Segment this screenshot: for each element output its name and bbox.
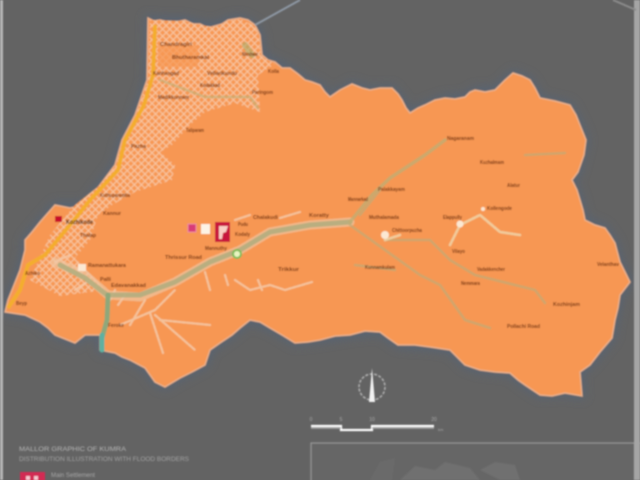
- east branches: [350, 153, 565, 328]
- town labels: Trikkur: [278, 267, 299, 273]
- town labels: Mannuthy: [205, 246, 227, 252]
- scale bar: [310, 417, 444, 432]
- town labels: Kollengode: [487, 206, 512, 212]
- town labels: Kannur: [103, 211, 121, 217]
- town labels: Nileshwar: [242, 52, 258, 58]
- town labels: Chittoorpuzha: [392, 228, 422, 234]
- town labels: Beyp: [16, 301, 27, 307]
- map title: MALLOR GRAPHIC OF KUMRA: [19, 447, 126, 453]
- tributaries: [55, 212, 312, 353]
- town labels: [16, 42, 619, 330]
- frame edges: [0, 0, 3, 480]
- main channel: [60, 222, 350, 295]
- map subtitle: DISTRIBUTION ILLUSTRATION WITH FLOOD BORDERS: [19, 457, 189, 463]
- town labels: Mannarkad: [348, 197, 368, 203]
- town labels: Ramanattukara: [88, 263, 126, 269]
- town labels: Azhiko: [25, 271, 40, 277]
- plain patch north: [158, 45, 198, 67]
- town labels: Madikkunnam: [158, 95, 190, 101]
- coastal strip: [8, 25, 155, 308]
- icon: white site marker: [201, 224, 210, 234]
- icon: pink site marker: [188, 224, 196, 232]
- icon: red site marker: [215, 222, 230, 242]
- town labels: Velanthav: [597, 262, 619, 268]
- town labels: Pazha: [131, 144, 146, 150]
- hatched coastal zone: [30, 19, 275, 296]
- town labels: Vadakkencher: [477, 267, 505, 273]
- town labels: Nagaranam: [447, 136, 475, 142]
- legend label: Main Settlement: [51, 473, 95, 479]
- scale bar: km: [438, 427, 444, 432]
- icon: north arrow: [359, 368, 385, 402]
- town labels: Alatur: [507, 183, 520, 189]
- panel: basin area: [5, 18, 630, 396]
- river network: [55, 45, 565, 353]
- town labels: Taliparam: [186, 128, 204, 134]
- legend icon: [20, 472, 45, 480]
- town labels: Feroke: [108, 323, 124, 329]
- inset locator map: [311, 443, 640, 480]
- label: regional town: Kozhikode: [66, 220, 94, 226]
- town labels: Chandragiri: [160, 42, 193, 48]
- scale bar: 20: [431, 417, 437, 423]
- town labels: Kodakkad: [200, 83, 220, 89]
- town labels: Koratty: [309, 213, 329, 219]
- scale bar: 5: [340, 417, 343, 423]
- town labels: Nemmara: [461, 281, 480, 287]
- town labels: Kuthuparamba: [100, 193, 130, 199]
- town labels: Palli: [100, 277, 112, 283]
- town labels: Kunnamkulam: [365, 265, 395, 271]
- town labels: Palakkayam: [378, 187, 406, 193]
- town labels: Elappully: [443, 215, 462, 221]
- town labels: Kolla: [268, 69, 279, 75]
- icon: green ring marker: [233, 250, 241, 258]
- town labels: Pollachi Road: [507, 324, 540, 330]
- town labels: Vellarikundu: [207, 71, 237, 77]
- town labels: Muthalamada: [369, 215, 399, 221]
- town labels: Vilayo: [452, 249, 465, 255]
- scale bar: 10: [369, 417, 375, 423]
- town labels: Bhutharamkal: [172, 55, 210, 61]
- town markers: [78, 207, 485, 271]
- town labels: Pudu: [238, 222, 248, 228]
- shadow around basin: [5, 18, 630, 396]
- town labels: Thalap: [80, 233, 96, 239]
- town labels: Paringom: [252, 90, 274, 96]
- floodplain margin: [55, 222, 350, 297]
- scale bar: 0: [310, 417, 313, 423]
- town labels: Kozhinjam: [553, 302, 581, 308]
- town labels: Chalakudi: [253, 215, 279, 221]
- town labels: Kodaly: [235, 232, 250, 238]
- town labels: Kuzhalmam: [480, 160, 504, 166]
- town labels: Kanhangad: [153, 71, 179, 77]
- icon: city marker: [55, 216, 62, 222]
- town labels: Edavanakkad: [111, 283, 146, 289]
- town labels: Thrissur Road: [165, 255, 202, 261]
